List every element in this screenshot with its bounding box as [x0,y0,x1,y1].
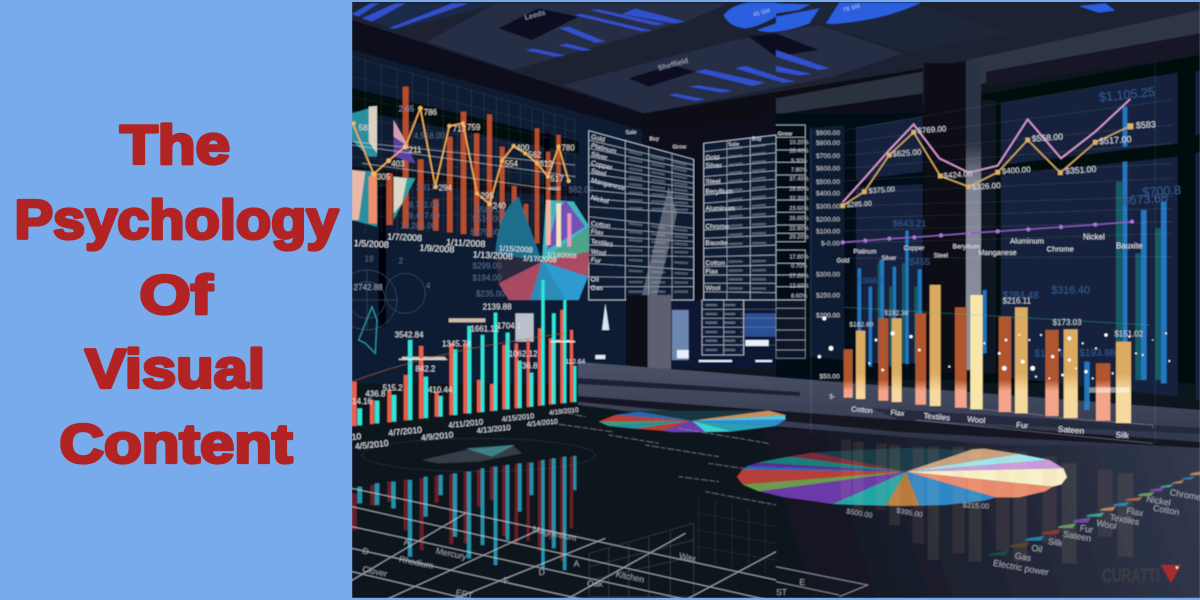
large floor pie chart: Textiles [1109,512,1141,527]
bar chart: textiles: $200.00 [816,312,840,319]
ceiling with panels: 45 SM [753,8,771,19]
tables of figures: Nickel [590,194,610,206]
bar chart: left wall lower: 410.44 [428,386,453,395]
floor table grid: Magnesium [532,524,577,543]
radar [352,269,426,331]
tables of figures: Gold [705,154,720,161]
pink line [843,99,1130,202]
bar chart: left wall lower: 436.8 [365,390,386,399]
bar chart: textiles: $151.02 [1114,330,1144,339]
dates: 4/14/2010 [526,418,558,429]
floor table grid: Mercury [435,546,468,562]
metal names: Silver [881,256,896,262]
large floor pie chart: Silk [1047,536,1064,549]
floor table grid: Kitchen [615,569,645,585]
axis values: $200.00 [816,216,840,223]
bar chart: left wall lower: 36.8 [522,361,538,370]
dates: 4/5/2010 [354,438,389,451]
tables of figures: Fur [590,257,602,265]
ceiling with panels: Leeds [524,8,546,22]
tables of figures: Copper [590,160,614,172]
axis values: $100.00 [816,228,840,235]
table: grow column: 29.20% [789,235,809,241]
small floor pie chart [599,411,785,432]
tables of figures: Buy [752,137,762,143]
table: grow column: 22.80% [789,226,809,232]
tables of figures: Textiles [590,238,614,248]
chart grid [352,57,575,233]
blue bars behind right chart: $673.68 [1122,191,1169,208]
purple line [843,222,1132,242]
title: Content [60,412,292,474]
bar chart: left wall lower: 842.2 [415,365,436,374]
dates: 4/7/2010 [388,425,423,438]
point labels: 786 [424,108,438,117]
date labels: 1/11/2008 [446,237,486,249]
point labels: 305 [377,172,391,181]
large floor pie chart: Oil [1031,543,1043,555]
metal names: Beryllium [953,243,980,250]
tables of figures: Gas [591,285,604,292]
line and bar chart: left wall: 4 [426,281,431,290]
blue bars behind right chart: $284.48 [1003,290,1039,301]
line and bar chart: left wall: 8,711.00 [409,200,440,209]
pies [352,106,377,157]
tables of figures: Cotton [705,260,725,267]
blue bars behind right chart: $1,105.25 [1098,85,1156,105]
metal names: Manganese [978,248,1017,257]
photo: data visualisation room [319,0,1200,600]
line and bar chart: left wall: $375.00 [470,228,500,237]
point labels: $326.00 [972,181,1001,192]
table: grow column: 17.80% [789,255,809,261]
bar chart: left wall lower: 1661.12 [470,325,500,334]
line and bar chart: left wall: $299.00 [473,261,502,270]
large floor pie chart: $215.00 [963,500,989,511]
floor table grid: Rhodium [398,554,434,571]
axis values: $600.00 [816,166,840,173]
table: grow column: 32.30% [789,196,809,202]
large floor pie chart: Nickel [1146,494,1171,508]
dates [351,407,579,451]
point labels: 403 [391,160,405,169]
line and bar chart: left wall: $235.00 [476,290,505,299]
large floor pie chart: Gas [1014,550,1032,563]
bar chart: left wall lower: 515.2 [383,384,403,393]
point labels: $583 [1136,119,1156,130]
axis values: $300.00 [816,272,840,279]
bar chart: left wall lower: 1704.1 [497,321,522,330]
date labels [354,231,577,264]
date labels: 1/19/2008 [547,252,577,260]
table: grow column [776,125,809,300]
bar chart: textiles: $50.00 [819,373,840,380]
bar chart: textiles: $162.60 [849,322,874,329]
ceiling bar charts [352,3,829,101]
bar chart: textiles: $216.11 [1003,296,1031,305]
bar chart: textiles: Flax [890,408,905,418]
dates: 4/9/2010 [420,429,454,443]
point labels: 517 [550,175,564,184]
point labels: $424.00 [943,169,973,180]
large floor pie chart: Cotton [1152,503,1180,517]
dates: 10 [351,431,362,442]
floor table grid: D [539,567,545,577]
table: grow column: 12.60% [789,283,809,289]
point labels: 400 [516,144,530,153]
ceiling with panels: Sheffield [657,56,689,73]
tables of figures: Gold [590,134,606,144]
tables of figures: Buy [649,137,659,143]
bar chart: textiles: Wool [967,415,986,425]
line and bar chart: left wall: $194.00 [473,274,502,283]
line and bar chart: left wall: 19 [365,255,374,264]
pillar [626,187,677,375]
blue bars behind right chart: $366.1 [858,275,884,285]
bar chart: left wall lower: 1062.12 [509,350,538,359]
bar chart: textiles: $192.38 [884,310,909,317]
bar chart: textiles: Cotton [851,404,873,415]
title: Psychology [14,188,339,250]
blue bars behind right chart: $455 [909,257,930,267]
point labels: 554 [505,160,519,169]
point labels: 294 [439,184,453,193]
line and bar chart: left wall: 4,518.00 [414,131,445,140]
metal names: Chrome [1047,245,1074,254]
floor table grid: A [574,559,580,569]
metal names: Copper [904,245,924,252]
table: grow column: 28.80% [789,187,809,193]
point labels: $400.00 [1002,165,1031,176]
ceiling with panels [352,0,1200,117]
table: grow column: Grow [778,131,793,137]
tan line [843,126,1130,206]
city lights through windows [579,300,776,368]
date labels: 1/17/2008 [523,254,557,264]
point labels: $285.00 [846,201,872,209]
bar chart: left wall lower: 1345.78 [442,340,471,349]
point labels: 717 [453,125,467,134]
axis values: $500.00 [816,179,840,186]
point labels: 759 [467,123,481,132]
blue bars behind right chart: $192.96 [1034,349,1071,360]
point labels: 240 [493,201,507,210]
reflected bars on the floor [841,440,1133,563]
point labels: 583 [359,124,373,133]
point labels: $375.00 [868,184,895,195]
tables of figures: Aluminum [705,206,735,213]
table: grow column: 9.30% [791,158,807,164]
large pie slices [495,197,589,300]
line and bar chart: left wall: $82.00 [569,186,594,195]
tables of figures [589,130,776,300]
dates: 4/15/2010 [501,411,535,424]
point labels: $625.00 [892,148,922,159]
table: grow column: 28.40% [789,149,809,155]
floor table grid [319,488,776,600]
tables of figures: Flax [590,228,604,237]
point labels [846,119,1156,209]
date labels: 1/13/2008 [473,249,513,261]
axis values: $800.00 [816,140,840,147]
large floor pie chart: Electric power [992,558,1050,577]
logo: Curatti: CURATTI [1102,566,1160,587]
ceiling beams and window walls [352,10,1200,400]
large floor pie chart: Sateen [1062,529,1092,544]
ceiling with panels: 78 SM [843,4,861,14]
bar chart: textiles: Sateen [1057,424,1085,436]
large floor pie chart: Fur [1079,523,1094,535]
axis values [816,130,840,299]
metal names: Steel [934,252,948,259]
large floor pie chart: Flax [1126,505,1145,518]
table: grow column: 8.60% [791,293,807,299]
axis values: $250.00 [816,292,840,299]
point labels [359,105,575,210]
title: The [120,114,230,176]
tables of figures: Oil [591,277,599,284]
metal names: Bauxite [1116,241,1143,250]
floor table grid: Oak [587,579,604,589]
tables of figures: Sale [728,142,739,148]
table: grow column: 27.20% [789,273,809,279]
floor table grid: D [362,546,370,557]
window panels [809,71,1200,400]
tables of figures: Silver [705,163,723,170]
bar chart: textiles: Textiles [923,411,950,423]
floor reflection of bar chart [352,456,576,570]
column [924,63,968,373]
line and bar chart: left wall: $589.00 [476,206,505,215]
floor table grid: Clover [362,564,388,579]
point labels: 780 [561,144,575,153]
tables of figures: Chrome [705,223,729,230]
bar chart: left wall lower: 112.64 [565,358,585,365]
bar chart: left wall lower: 3542.84 [395,330,424,339]
metal names: Platinum [853,249,877,255]
blue bars behind right chart: $193.88 [1079,348,1116,359]
point labels: 295 [480,191,494,200]
point labels: $769.00 [917,124,947,135]
metal names [837,232,1143,265]
blue bars behind right chart: $643.21 [893,219,926,229]
tables of figures: Cotton [590,220,611,230]
point labels: 211 [409,146,422,155]
axis values: $300.00 [816,204,840,211]
dates: 4/19/2010 [549,407,579,417]
table: grow column: 7.80% [791,167,807,173]
axis values: $900.00 [816,130,840,137]
tables of figures: Grow [673,145,687,151]
floor table grid: F [504,575,509,585]
bar chart: textiles: Silk [1115,429,1130,441]
point labels: $558.00 [1031,131,1064,144]
tables of figures: Sale [625,130,637,136]
legend on floor [988,472,1200,555]
point labels: 612 [539,160,553,169]
ceiling pie [724,3,1115,32]
floor table grid: Wax [678,551,698,564]
axis values: $400.00 [816,191,840,198]
date labels: 1/5/2008 [354,238,389,250]
metal names: Gold [837,259,849,265]
title: Of [140,264,213,326]
blue bars behind right chart: $316.40 [1051,284,1090,296]
tables of figures: Beryllium [705,188,733,195]
yellow line [352,108,569,204]
table: grow column: 0.70% [791,264,807,270]
table: grow column: 10.20% [789,140,809,146]
large floor pie chart: ST [776,587,788,597]
tables of figures: Steel [590,168,607,178]
bar chart: left wall lower: 2139.88 [483,302,512,311]
point labels: $517.00 [1099,134,1132,146]
bar chart: textiles [816,285,1170,443]
floor glint [362,438,595,472]
tables of figures: Flax [705,268,719,275]
tables of figures: Wool [705,285,721,292]
dates: 4/11/2010 [448,417,484,430]
tables of figures: Silver [590,151,609,162]
date labels: 1/9/2008 [419,243,455,254]
point labels: $351.00 [1065,164,1097,176]
left wall [352,50,642,383]
tables of figures: Platinum [590,142,617,156]
axis values: $-0.00 [821,241,840,248]
line and bar chart: left wall: 2 [399,256,404,265]
tables of figures: Wool [590,248,607,257]
date labels: 1/15/2008 [499,244,533,254]
floor table grid: A [404,537,410,547]
tables of figures: Manganese [590,177,626,192]
tables of figures: Bauxite [705,240,728,247]
point labels: 2.65 [399,105,415,114]
blue bars behind right chart [858,85,1181,410]
large floor pie chart: Wool [1096,518,1117,531]
bar chart: textiles: $- [829,393,835,400]
line and bar chart: left wall: 7,317.00 [415,183,447,192]
point labels: 562 [528,150,542,159]
table: grow column: 26.00% [789,216,809,222]
dates: 4/13/2010 [476,423,511,435]
line and bar chart: left wall [337,87,594,330]
tables of figures: Steel [705,178,721,185]
blue bars behind right chart: $700.8 [1142,183,1181,200]
bar chart: textiles: Fur [1016,420,1029,430]
large floor pie chart: $395.00 [896,506,923,519]
title [14,114,339,474]
orange bars [386,87,561,247]
large floor pie chart [737,440,1200,597]
line and bar chart: left wall: 2742.88 [354,283,383,292]
floor [352,362,1200,598]
large floor pie chart: E [799,577,805,587]
floor text [552,413,776,505]
date labels: 1/7/2008 [387,231,422,243]
bar chart: textiles: $173.03 [1053,318,1082,327]
sparkling lights [818,316,1170,379]
top and bottom blue strips [352,0,1200,600]
axis values: $700.00 [816,153,840,160]
line chart: metals prices [811,62,1173,443]
line and bar chart: left wall: 10,203.00 [400,221,436,230]
title: Visual [85,338,265,400]
metal names: Aluminum [1010,236,1044,245]
line and bar chart: left wall: 9,427.00 [409,212,440,221]
table: grow column: 23.60% [789,206,809,212]
bar chart: left wall lower: 14.16 [352,397,373,406]
metal names: Nickel [1083,232,1105,241]
large floor pie chart: $500.00 [846,506,873,520]
bar chart: left wall lower [351,280,585,451]
table: grow column: 37.40% [789,177,809,183]
line and bar chart: left wall: $516.00 [473,215,502,224]
